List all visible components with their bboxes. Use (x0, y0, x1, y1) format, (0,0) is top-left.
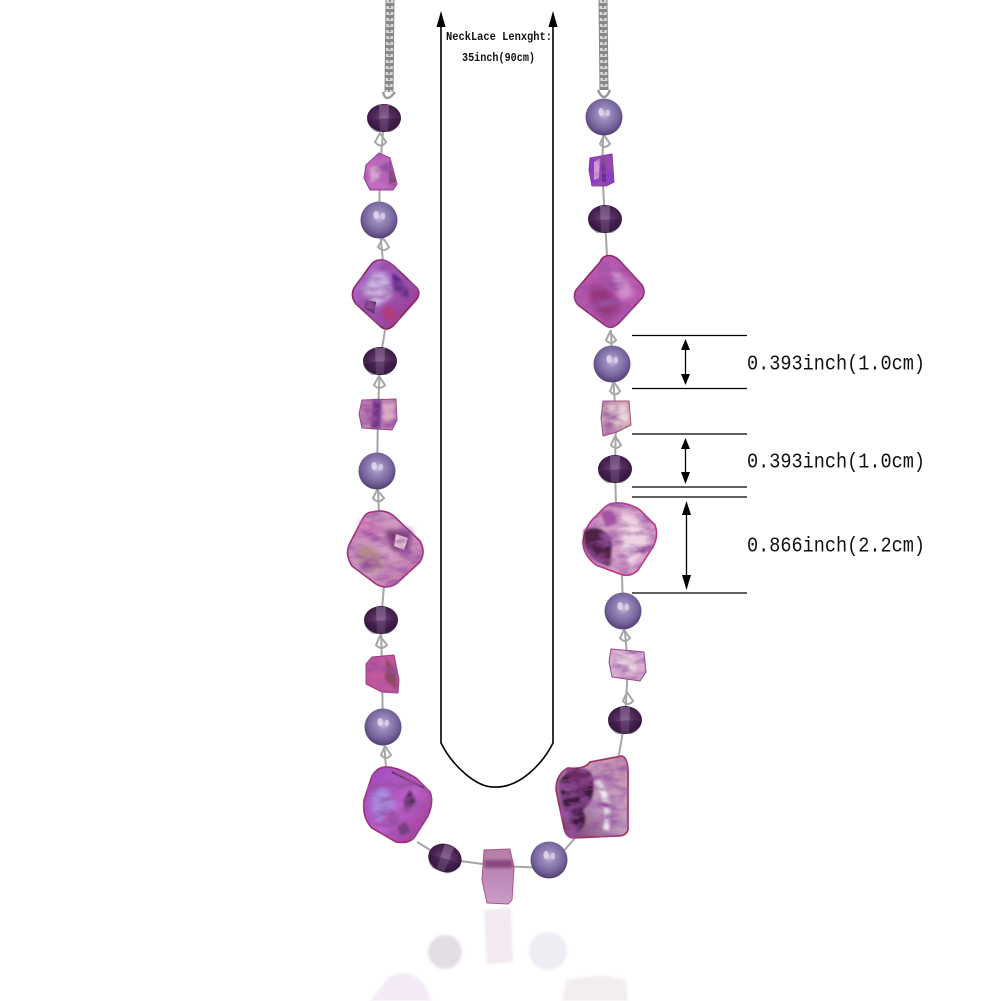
necklace length label: 35inch(90cm) (462, 51, 535, 65)
shell bead (364, 153, 397, 190)
mirror reflection of bottom beads (370, 908, 628, 1001)
wire connectors between beads (373, 117, 633, 868)
crystal bead (608, 706, 642, 734)
crystal bead (424, 839, 466, 877)
shell bead, center bottom (482, 849, 514, 904)
pearl bead (360, 202, 398, 238)
measurement: pearl bead 1.0cm: 0.393inch(1.0cm) (747, 354, 925, 376)
right length arrowhead (548, 11, 558, 27)
shell bead (609, 649, 646, 681)
pearl bead (594, 346, 630, 382)
measurement: crystal bead 1.0cm: 0.393inch(1.0cm) (747, 452, 925, 474)
left length arrowhead (436, 11, 446, 27)
large shell bead, upper left (352, 260, 419, 329)
large shell bead, middle right (583, 503, 657, 575)
shell bead (601, 401, 631, 436)
pearl bead (586, 98, 622, 136)
crystal bead (363, 347, 397, 375)
necklace length label: NeckLace Lenxght: (446, 30, 552, 44)
measurement: shell bead 2.2cm (632, 497, 925, 593)
shell bead (589, 154, 614, 186)
large shell bead, upper right (574, 256, 644, 327)
pearl bead (604, 592, 642, 630)
shell bead (359, 399, 397, 430)
left chain (383, 0, 395, 98)
measurement: shell bead 2.2cm: 0.866inch(2.2cm) (747, 536, 925, 558)
crystal bead (367, 104, 401, 132)
large shell bead, lower left (364, 767, 432, 842)
necklace length label (446, 30, 552, 65)
large shell bead, middle left (348, 511, 423, 587)
large shell bead, lower right (556, 756, 628, 838)
necklace length outline with arrows (436, 11, 558, 787)
pearl bead (358, 452, 396, 490)
measurement: pearl bead 1.0cm (632, 336, 925, 388)
pearl bead (364, 708, 402, 746)
shell bead (366, 655, 399, 693)
measurement: crystal bead 1.0cm (632, 434, 925, 487)
crystal bead (588, 205, 622, 233)
pearl bead (530, 842, 568, 878)
right chain (598, 0, 610, 97)
crystal bead (598, 455, 632, 483)
crystal bead (364, 606, 398, 634)
